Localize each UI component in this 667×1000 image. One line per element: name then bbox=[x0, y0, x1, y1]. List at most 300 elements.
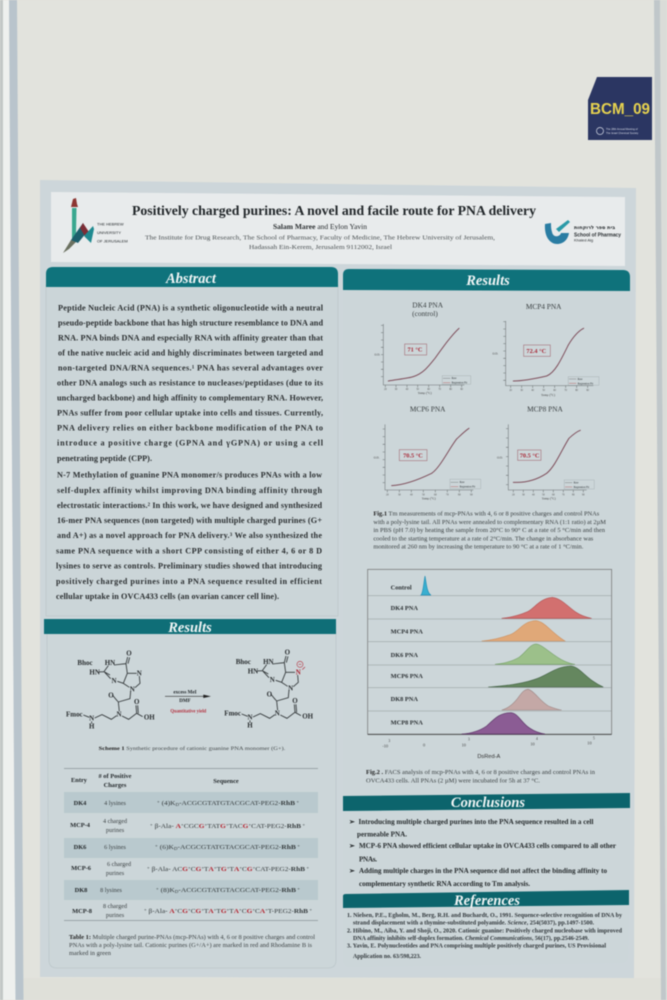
chart: MCP4 PNA: MCP4 PNA bbox=[526, 302, 562, 311]
molecule: protected guanine PNA monomer: N bbox=[130, 685, 135, 693]
row MCP-8: G bbox=[221, 909, 227, 915]
chart: DK4 PNA: (control) bbox=[412, 309, 438, 318]
abstract paragraph 2: 16-mer PNA sequences (non targeted) with multiple charged purines (G+ bbox=[57, 516, 322, 525]
row MCP-4: β-Ala- bbox=[153, 824, 176, 830]
abstract paragraph 1: Peptide Nucleic Acid (PNA) is a synthetic oligonucleotide with a neutral bbox=[58, 304, 324, 312]
row MCP-4: G bbox=[243, 824, 249, 830]
molecule: cationic guanine PNA monomer: N bbox=[270, 676, 275, 684]
row DK8: (8)K bbox=[159, 887, 176, 894]
row DK4 bbox=[74, 799, 300, 807]
histogram: MCP4 PNA: MCP4 PNA bbox=[391, 629, 423, 636]
heading: Results right: Results bbox=[465, 273, 510, 289]
row MCP-8: C bbox=[255, 909, 260, 915]
row MCP-6: + bbox=[188, 865, 192, 870]
abstract paragraph 2: self-duplex affinity whilst improving DNA binding affinity through bbox=[57, 486, 322, 495]
icon: School of Pharmacy logo: בית ספר לרוקחות bbox=[574, 225, 615, 231]
panel: results right bbox=[343, 269, 630, 796]
row MCP-6: + bbox=[253, 865, 256, 870]
molecule: cationic guanine PNA monomer: H bbox=[247, 721, 253, 729]
row DK4: (4)K bbox=[160, 800, 176, 807]
heading: Conclusions: Conclusions bbox=[451, 795, 525, 811]
figure 1 caption: monitored at 260 nm by increasing the temperature to 90 °C at a rate of 1 °C/min. bbox=[373, 543, 584, 550]
row MCP-4: CAT-PEG2- bbox=[251, 824, 287, 830]
row MCP-8: + bbox=[201, 907, 205, 912]
abstract paragraph 1: uncharged backbone) and high affinity to complementary RNA. However, bbox=[57, 394, 323, 402]
row MCP-8: T-PEG2- bbox=[268, 909, 294, 915]
row MCP-8: MCP-8 bbox=[72, 908, 92, 915]
row MCP-8: + bbox=[214, 907, 217, 912]
icon: School of Pharmacy logo: School of Pharmacy bbox=[574, 232, 621, 238]
row MCP-8: 8 charged bbox=[103, 903, 128, 910]
figure 1 caption: with a poly-lysine tail. All PNAs were annealed to complementary RNA (1:1 ratio) at 2µM bbox=[373, 519, 607, 526]
row MCP-8: G bbox=[182, 909, 188, 915]
row DK6: 6 lysines bbox=[104, 844, 126, 851]
molecule: protected guanine PNA monomer: H bbox=[89, 722, 95, 730]
row MCP-8: T bbox=[229, 909, 234, 915]
row MCP-4: TAT bbox=[207, 824, 221, 830]
x axis: DsRed-A: 10 bbox=[530, 741, 535, 746]
abstract paragraph 2: cellular uptake in OVCA433 cells (an ovarian cancer cell line). bbox=[56, 592, 279, 601]
heading: References: References bbox=[453, 893, 520, 909]
panel: results left bbox=[44, 619, 336, 968]
reaction arrow with conditions: excess MeI bbox=[173, 691, 197, 696]
row DK8: D bbox=[175, 889, 179, 894]
row DK6: RhB bbox=[281, 845, 296, 851]
row MCP-8: G bbox=[196, 909, 202, 915]
row MCP-4: + bbox=[204, 822, 208, 827]
conclusion bullets: MCP-6 PNA showed efficient cellular uptake in OVCA433 cells compared to all other bbox=[359, 842, 616, 850]
chart: MCP4 PNA: Temp (°C) bbox=[541, 393, 555, 397]
reference list: Application no. 63/598,223. bbox=[353, 954, 422, 960]
row MCP-6: + bbox=[147, 865, 151, 870]
chart: MCP6 PNA: 90 bbox=[470, 493, 473, 496]
chart: MCP6 PNA: 40 bbox=[410, 493, 413, 496]
table caption: PNAs with a poly-lysine tail. Cationic purines (G+/A+) are marked in red and Rhodamine B is bbox=[69, 942, 313, 949]
figure 2 caption: Fig.2 . FACS analysis of mcp-PNAs with 4, 6 or 8 positive charges and control PNAs in bbox=[366, 769, 595, 776]
row MCP-4: + bbox=[248, 822, 252, 827]
chart: MCP8 PNA: 20 bbox=[512, 493, 515, 496]
row DK6: + bbox=[296, 843, 301, 848]
chart: DK4 PNA: 71 °C bbox=[407, 347, 423, 354]
figure 1 caption: cooled to the starting temperature at a rate of 2°C/min. The change in absorbance was bbox=[373, 535, 594, 542]
chart: DK4 PNA: 60 bbox=[427, 388, 431, 391]
chart: DK4 PNA: 30 bbox=[395, 388, 398, 391]
figure 2 caption: OVCA433 cells. All PNAs (2 µM) were incubated for 5h at 37 °C. bbox=[366, 777, 541, 784]
molecule: cationic guanine PNA monomer: N bbox=[296, 669, 301, 677]
row MCP-4: purines bbox=[106, 827, 125, 834]
row DK6: DK6 bbox=[74, 844, 87, 851]
row DK8: -ACGCGTATGTACGCAT-PEG2- bbox=[178, 888, 281, 894]
row DK4: D bbox=[176, 802, 179, 807]
panel: references bbox=[343, 890, 629, 967]
chart: MCP8 PNA: 80 bbox=[572, 493, 575, 496]
molecule: cationic guanine PNA monomer: N bbox=[247, 713, 253, 721]
row DK6 bbox=[74, 843, 301, 851]
row DK8: RhB bbox=[281, 888, 296, 894]
molecule: protected guanine PNA monomer: N bbox=[137, 670, 142, 678]
x axis: DsRed-A: 10 bbox=[462, 742, 466, 747]
chart: MCP4 PNA: 72.4 °C bbox=[526, 348, 547, 355]
abstract paragraph 2: positively charged purines into a PNA sequence resulted in efficient bbox=[56, 577, 322, 586]
row DK8: + bbox=[296, 886, 301, 891]
heading: Results left: Results bbox=[167, 620, 212, 636]
row MCP-6: A bbox=[209, 867, 215, 873]
chart: MCP4 PNA: Raw bbox=[578, 378, 583, 381]
abstract paragraph 1: pseudo-peptide backbone that has high structure resemblance to DNA and bbox=[58, 318, 323, 328]
row MCP-6: C bbox=[242, 867, 247, 873]
molecule: protected guanine PNA monomer: N bbox=[111, 677, 117, 685]
molecule: protected guanine PNA monomer: O bbox=[126, 650, 132, 658]
row DK4: -ACGCGTATGTACGCAT-PEG2- bbox=[179, 801, 281, 807]
row DK6: D bbox=[174, 846, 178, 851]
chart: DK4 PNA: 50 bbox=[416, 388, 420, 391]
histogram: DK6 PNA: DK6 PNA bbox=[391, 652, 418, 659]
reference list: 1. Nielsen, P.E., Egholm, M., Berg, R.H. and Buchardt, O., 1991. Sequence-selective recognition of DNA by bbox=[347, 913, 622, 919]
conclusion bullets bbox=[349, 818, 616, 888]
row MCP-8: A bbox=[260, 909, 266, 915]
table header: Sequence bbox=[213, 778, 239, 785]
row DK8: DK8 bbox=[75, 887, 87, 894]
sticker: BCM_09: BCM_09 bbox=[590, 101, 650, 118]
reaction arrow with conditions: Quantitative yield bbox=[170, 709, 207, 714]
chart: MCP8 PNA: 50 bbox=[542, 493, 545, 496]
chart: MCP6 PNA: 20 bbox=[386, 493, 389, 496]
abstract paragraph 1: PNAs suffer from poor cellular uptake into cells and tissues. Currently, bbox=[57, 408, 323, 418]
row MCP-6: CAT-PEG2- bbox=[255, 867, 291, 873]
row MCP-4: TAC bbox=[229, 824, 243, 830]
row DK4: RhB bbox=[281, 801, 295, 807]
chart: MCP6 PNA: MCP6 PNA bbox=[410, 404, 446, 413]
conclusion bullets: ➢ bbox=[349, 867, 356, 875]
chart: DK4 PNA: Temp (°C) bbox=[418, 391, 432, 395]
histogram: DK8 PNA bbox=[391, 689, 562, 710]
row DK4: 4 lysines bbox=[104, 800, 126, 807]
table header bbox=[71, 773, 239, 789]
row MCP-8: A bbox=[208, 909, 214, 915]
molecule: cationic guanine PNA monomer: O bbox=[267, 690, 273, 698]
row MCP-6: C bbox=[191, 867, 196, 873]
row MCP-4: 4 charged bbox=[103, 818, 128, 825]
row MCP-6 bbox=[71, 861, 310, 877]
heading: Results right bbox=[343, 269, 630, 291]
row MCP-6: + bbox=[239, 865, 243, 870]
reference list: 2. Hibino, M., Aiba, Y. and Shoji, O., 2020. Cationic guanine: Positively charged nucleobase with improved bbox=[347, 928, 623, 934]
x axis: DsRed-A: 0 bbox=[423, 742, 425, 747]
chart: DK4 PNA: 90 bbox=[460, 388, 464, 391]
panel: abstract bbox=[46, 267, 338, 616]
row MCP-8: C bbox=[177, 909, 182, 915]
chart: MCP8 PNA: Regression Fit bbox=[574, 486, 589, 489]
row MCP-8: + bbox=[144, 907, 148, 912]
histogram: MCP8 PNA bbox=[391, 713, 545, 734]
row DK6: (6)K bbox=[158, 844, 175, 851]
row MCP-8: + bbox=[227, 907, 230, 912]
sticker: BCM_09: The Israel Chemical Society bbox=[606, 131, 639, 135]
molecule: cationic guanine PNA monomer: O bbox=[292, 697, 298, 705]
chart: MCP6 PNA: Regression Fit bbox=[460, 486, 475, 489]
poster header card bbox=[51, 192, 625, 266]
table header: # of Positive bbox=[98, 773, 132, 780]
histogram: DK8 PNA: DK8 PNA bbox=[391, 696, 418, 703]
row MCP-4: + bbox=[301, 822, 306, 827]
reference list: DNA affinity inhibits self-duplex formation. Chemical Communications , 56(17), pp.2546-2549. bbox=[353, 935, 590, 942]
row MCP-6: 6 charged bbox=[107, 861, 132, 868]
authors: Salam Maree and Eylon Yavin bbox=[273, 224, 368, 231]
row MCP-6: + bbox=[201, 865, 205, 870]
chart: DK4 PNA: DK4 PNA bbox=[412, 300, 444, 309]
conclusion bullets: Adding multiple charges in the PNA sequence did not affect the binding affinity to bbox=[359, 867, 607, 875]
abstract paragraph 1: introduce a positive charge (GPNA and γGPNA) or using a cell bbox=[57, 438, 324, 448]
row MCP-8: purines bbox=[106, 912, 125, 919]
chart: MCP8 PNA: 90 bbox=[582, 493, 585, 496]
x axis: DsRed-A bbox=[382, 736, 595, 760]
icon: Hebrew University logo: UNIVERSITY bbox=[97, 230, 121, 235]
figure 1 caption: Fig.1 Tm measurements of mcp-PNAs with 4, 6 or 8 positive charges and control PNAs bbox=[373, 511, 600, 518]
row MCP-6: G bbox=[247, 867, 253, 873]
histogram: Control bbox=[391, 576, 431, 595]
icon: Hebrew University logo: THE HEBREW bbox=[97, 222, 124, 226]
sticker: BCM_09: The 28th Annual Meeting of bbox=[606, 127, 638, 131]
row MCP-8: β-Ala- bbox=[147, 909, 169, 915]
histogram: DK4 PNA: DK4 PNA bbox=[391, 605, 418, 612]
chart: DK4 PNA: O.D. bbox=[374, 353, 380, 357]
figure 1: melting curves bbox=[373, 300, 607, 550]
histogram: MCP4 PNA bbox=[391, 621, 565, 641]
molecule: cationic guanine PNA monomer: Bhoc bbox=[236, 658, 251, 666]
x axis: DsRed-A: -10 bbox=[382, 743, 388, 748]
row MCP-8: T bbox=[204, 909, 209, 915]
chart: MCP8 PNA: 60 bbox=[552, 493, 555, 496]
chart: MCP8 PNA: O.D. bbox=[497, 455, 503, 459]
table 1: PNA sequences bbox=[64, 768, 318, 920]
chart: DK4 PNA: 40 bbox=[406, 388, 409, 391]
affiliation: The Institute for Drug Research, The School of Pharmacy, Faculty of Medicine, The Hebrew University of Jerusalem, bbox=[145, 234, 495, 242]
chart: MCP8 PNA: Temp (°C) bbox=[542, 497, 556, 501]
conclusion bullets: Introducing multiple charged purines into the PNA sequence resulted in a cell bbox=[358, 818, 594, 826]
row DK4: DK4 bbox=[74, 800, 87, 807]
conclusion bullets: complementary synthetic RNA according to Tm analysis. bbox=[359, 880, 530, 888]
chart: MCP8 PNA: MCP8 PNA bbox=[527, 404, 564, 413]
row DK8: + bbox=[156, 886, 160, 891]
chart: MCP4 PNA: Regression Fit bbox=[578, 382, 593, 385]
figure 1 caption: in PBS (pH 7.0) by heating the sample from 20°C to 90° C at a rate of 5 °C/min and then bbox=[373, 527, 605, 534]
abstract paragraph 1: other DNA analogs such as resistance to nucleases/peptidases (due to its bbox=[57, 378, 323, 388]
molecule: cationic guanine PNA monomer: N bbox=[288, 684, 293, 692]
row MCP-6: + bbox=[305, 865, 310, 870]
row MCP-6: T bbox=[230, 867, 234, 873]
chart: MCP6 PNA: 60 bbox=[434, 493, 437, 496]
chart: MCP4 PNA: 80 bbox=[575, 389, 579, 392]
row MCP-8: G bbox=[247, 909, 253, 915]
x axis: DsRed-A: DsRed-A bbox=[477, 754, 500, 760]
row MCP-4: + bbox=[181, 822, 185, 827]
abstract paragraph 2: and A+) as a novel approach for PNA delivery.³ We also synthesized the bbox=[57, 531, 322, 540]
x axis: DsRed-A: 10 bbox=[587, 740, 592, 745]
row MCP-4: MCP-4 bbox=[70, 822, 91, 829]
row MCP-6: + bbox=[214, 865, 217, 870]
abstract paragraph 2 bbox=[56, 470, 323, 601]
row MCP-8: + bbox=[308, 907, 313, 912]
table header: Charges bbox=[104, 782, 127, 789]
reaction arrow with conditions bbox=[165, 691, 211, 714]
chart: DK4 PNA: Regression Fit bbox=[452, 382, 467, 385]
chart: MCP6 PNA bbox=[374, 404, 481, 501]
title: Positively charged purines: A novel and facile route for PNA delivery bbox=[132, 203, 536, 218]
chart: MCP4 PNA: 20 bbox=[509, 389, 513, 392]
molecule: protected guanine PNA monomer: N bbox=[116, 711, 122, 719]
row MCP-4: + bbox=[226, 822, 230, 827]
heading: Abstract bbox=[46, 267, 338, 287]
row MCP-4: G bbox=[220, 824, 226, 830]
chart: MCP6 PNA: O.D. bbox=[374, 455, 380, 459]
molecule: cationic guanine PNA monomer: Fmoc bbox=[224, 709, 241, 717]
molecule: cationic guanine PNA monomer: N bbox=[275, 710, 280, 718]
row MCP-6: + bbox=[227, 865, 230, 870]
icon: Hebrew University logo: OF JERUSALEM bbox=[97, 238, 128, 244]
abstract paragraph 1: penetrating peptide (CPP). bbox=[57, 454, 152, 463]
abstract paragraph 1: of the native nucleic acid and highly discriminates between targeted and bbox=[58, 348, 323, 358]
chart: MCP4 PNA bbox=[492, 302, 599, 397]
icon: School of Pharmacy logo bbox=[545, 220, 621, 244]
molecule: cationic guanine PNA monomer: O bbox=[285, 649, 291, 657]
row MCP-8: + bbox=[239, 907, 243, 912]
row MCP-8: + bbox=[188, 907, 192, 912]
abstract paragraph 1: non-targeted DNA/RNA sequences.¹ PNA has several advantages over bbox=[58, 364, 323, 372]
chart: MCP4 PNA: O.D. bbox=[492, 351, 498, 355]
row MCP-4: A bbox=[176, 824, 182, 830]
row DK6: + bbox=[155, 843, 159, 848]
row MCP-6: A bbox=[234, 867, 240, 873]
x axis: DsRed-A: 3 bbox=[468, 738, 470, 742]
table caption bbox=[69, 934, 315, 957]
row MCP-6: purines bbox=[106, 870, 125, 877]
row MCP-8: RhB bbox=[294, 909, 308, 915]
reference list: strand displacement with a thymine-substituted polyamide. Science, 254(5037), pp.1497-1500. bbox=[353, 920, 595, 926]
row MCP-4: G bbox=[199, 824, 205, 830]
molecule: protected guanine PNA monomer: O bbox=[108, 691, 114, 699]
row MCP-8: A bbox=[169, 909, 175, 915]
row MCP-8: C bbox=[191, 909, 196, 915]
panel: conclusions bbox=[343, 793, 630, 892]
molecule: protected guanine PNA monomer: Fmoc bbox=[66, 710, 83, 718]
chart: MCP6 PNA: Raw bbox=[460, 481, 465, 484]
row MCP-4: + bbox=[150, 822, 154, 827]
histogram: DK6 PNA bbox=[391, 644, 575, 664]
row DK4: + bbox=[157, 799, 161, 804]
histogram: MCP6 PNA: MCP6 PNA bbox=[391, 673, 423, 680]
chart: MCP6 PNA: Temp (°C) bbox=[422, 497, 436, 501]
chart: MCP6 PNA: 70 bbox=[446, 493, 449, 496]
chart: DK4 PNA: 80 bbox=[449, 388, 453, 391]
molecule: cationic guanine PNA monomer bbox=[224, 649, 314, 729]
x axis: DsRed-A: 4 bbox=[536, 737, 538, 741]
chart: DK4 PNA: 70 bbox=[438, 388, 442, 391]
row MCP-8: + bbox=[265, 907, 269, 912]
affiliation bbox=[145, 234, 495, 251]
chart: MCP4 PNA: 30 bbox=[520, 389, 524, 392]
chart: DK4 PNA: 20 bbox=[384, 388, 387, 391]
row MCP-8: + bbox=[175, 907, 178, 912]
conclusion bullets: permeable PNA. bbox=[357, 830, 407, 838]
chart: MCP6 PNA: 50 bbox=[422, 493, 425, 496]
row DK8: 8 lysines bbox=[100, 887, 122, 894]
molecule: protected guanine PNA monomer: OH bbox=[144, 714, 155, 722]
row MCP-6: G bbox=[196, 867, 202, 873]
chart: MCP4 PNA: 40 bbox=[531, 389, 535, 392]
row MCP-8: C bbox=[242, 909, 247, 915]
molecule: protected guanine PNA monomer: Bhoc bbox=[77, 659, 93, 667]
row MCP-8: + bbox=[252, 907, 256, 912]
row MCP-6: MCP-6 bbox=[71, 865, 92, 872]
histogram: Control: Control bbox=[391, 584, 412, 591]
chart: MCP4 PNA: 50 bbox=[542, 389, 546, 392]
abstract paragraph 2: same PNA sequence with a short CPP consisting of either 4, 6 or 8 D bbox=[56, 546, 322, 556]
row MCP-6: G bbox=[221, 867, 227, 873]
figure 1 caption bbox=[373, 511, 607, 550]
figure 2: FACS histograms bbox=[366, 569, 612, 784]
abstract paragraph 2: electrostatic interactions.² In this work, we have designed and synthesized bbox=[57, 501, 322, 510]
poster board bbox=[40, 180, 636, 978]
row MCP-6: T bbox=[217, 867, 221, 873]
row MCP-6: β-Ala- AC bbox=[150, 867, 182, 873]
chart: MCP6 PNA: 30 bbox=[398, 493, 401, 496]
molecule: cationic guanine PNA monomer: HN bbox=[263, 658, 274, 666]
scheme 1: synthesis of cationic guanine monomer bbox=[66, 649, 314, 752]
x axis: DsRed-A: 5 bbox=[593, 736, 595, 740]
row MCP-4: RhB bbox=[287, 824, 301, 830]
conclusion bullets: PNAs. bbox=[359, 856, 377, 864]
row MCP-8: T bbox=[216, 909, 221, 915]
figure 2 caption bbox=[366, 769, 595, 784]
conclusion bullets: ➢ bbox=[349, 818, 356, 826]
molecule: protected guanine PNA monomer: HN bbox=[105, 659, 115, 667]
molecule: cationic guanine PNA monomer: OH bbox=[302, 713, 314, 721]
molecule: protected guanine PNA monomer: O bbox=[134, 698, 140, 706]
chart: MCP8 PNA bbox=[497, 404, 594, 501]
sticker: BCM_09 bbox=[588, 77, 652, 140]
row MCP-6: G bbox=[182, 867, 188, 873]
reference list bbox=[347, 913, 623, 960]
heading: References bbox=[343, 890, 629, 909]
heading: Conclusions bbox=[343, 793, 630, 811]
row MCP-8: A bbox=[234, 909, 240, 915]
scheme caption: Scheme 1 Synthetic procedure of cationic guanine PNA monomer (G+). bbox=[99, 747, 285, 752]
heading: Results left bbox=[44, 619, 336, 636]
reaction arrow with conditions: DMF bbox=[179, 699, 191, 704]
chart: MCP4 PNA: 90 bbox=[586, 389, 590, 392]
affiliation: Hadassah Ein-Kerem, Jerusalem 9112002, Israel bbox=[249, 244, 392, 251]
reference list: 3. Yavin, E. Polynucleotides and PNA comprising multiple positively charged purines, US Provisional bbox=[347, 944, 606, 950]
chart: MCP8 PNA: 40 bbox=[532, 493, 535, 496]
icon: School of Pharmacy logo: Khaled Alg bbox=[574, 238, 593, 242]
heading: Abstract: Abstract bbox=[165, 271, 217, 287]
chart: MCP8 PNA: 30 bbox=[522, 493, 525, 496]
chart: MCP6 PNA: 80 bbox=[458, 493, 461, 496]
row DK4: + bbox=[295, 799, 300, 804]
row MCP-6: RhB bbox=[291, 867, 305, 873]
row DK8 bbox=[75, 886, 301, 894]
row MCP-6: T bbox=[204, 867, 209, 873]
molecule: cationic guanine PNA monomer: HN bbox=[248, 667, 258, 675]
chart: DK4 PNA: Raw bbox=[452, 377, 457, 380]
histogram: MCP8 PNA: MCP8 PNA bbox=[391, 719, 423, 726]
chart: MCP8 PNA: 70 bbox=[562, 493, 565, 496]
abstract paragraph 2: N-7 Methylation of guanine PNA monomer/s produces PNAs with a low bbox=[57, 470, 322, 480]
table caption: Table 1: Multiple charged purine-PNAs (mcp-PNAs) with 4, 6 or 8 positive charges and control bbox=[69, 934, 315, 941]
chart: MCP4 PNA: 60 bbox=[553, 389, 557, 392]
row MCP-4 bbox=[70, 818, 306, 834]
conclusion bullets: ➢ bbox=[349, 842, 356, 850]
